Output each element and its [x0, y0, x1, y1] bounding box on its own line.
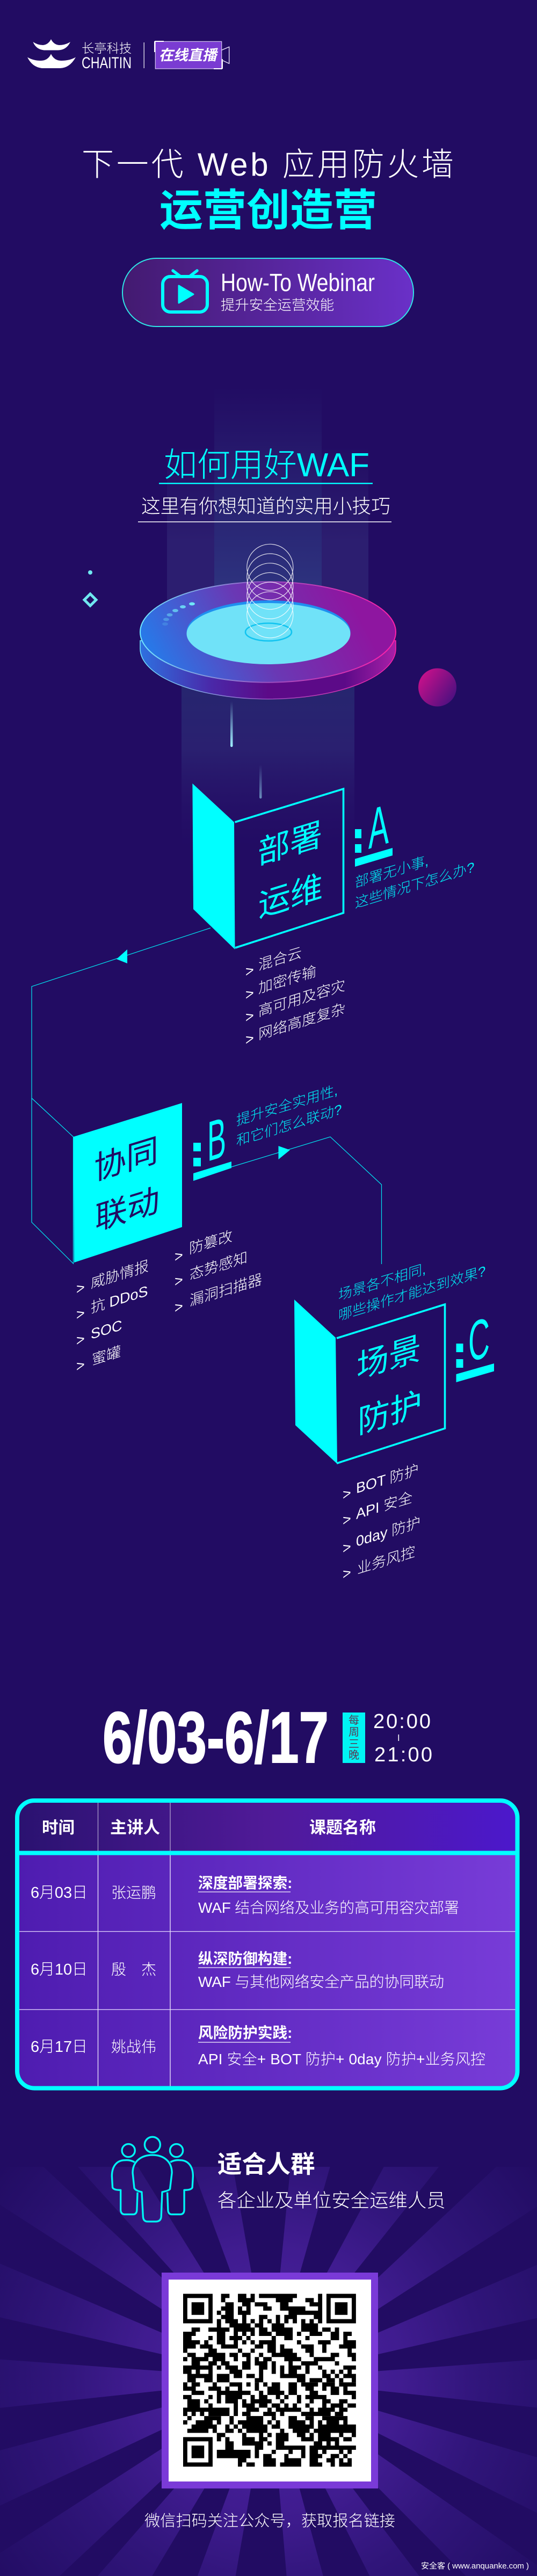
list B right: 防篡改: [189, 1228, 233, 1257]
row: June 10: 6月10日: [31, 1961, 88, 1978]
caption B: 提升安全实用性,: [236, 1082, 338, 1129]
list A: >: [245, 961, 254, 980]
subtitle: 运营创造营: [159, 187, 377, 235]
label: B: [193, 1105, 231, 1181]
row: June 10: 殷 杰: [111, 1961, 156, 1978]
time range: [373, 1710, 432, 1766]
list C: 业务风控: [357, 1543, 415, 1577]
list C: [343, 1461, 420, 1583]
list C: API 安全: [356, 1489, 412, 1522]
label: B: B: [207, 1105, 226, 1173]
list A: 高可用及容灾: [258, 977, 345, 1020]
arrow: B to C: [231, 1137, 381, 1264]
sunburst background: [0, 2167, 537, 2576]
label: C: C: [468, 1305, 490, 1374]
logo: Chaitin: CHAITIN: [82, 54, 132, 72]
list B left: SOC: [91, 1317, 122, 1343]
streaks of light: [230, 701, 262, 799]
date range: 6/03-6/17: [103, 1697, 329, 1778]
row: June 17: API 安全+ BOT 防护+ 0day 防护+业务风控: [198, 2051, 485, 2067]
caption A: 部署无小事,: [355, 853, 429, 891]
badge: live online: 在线直播: [158, 47, 220, 63]
list A: >: [245, 1029, 254, 1048]
logo: Chaitin: 长亭科技: [82, 41, 132, 55]
beams of light: [167, 387, 368, 848]
row: June 3: 深度部署探索:: [198, 1875, 292, 1891]
badge: every wednesday night: 晚: [349, 1749, 359, 1761]
list A: >: [245, 1007, 254, 1026]
badge: every wednesday night: 周: [349, 1726, 359, 1738]
arrow: A to B: [32, 928, 211, 1264]
badge: live online: [144, 41, 229, 69]
list C: >: [343, 1484, 351, 1503]
list C: BOT 防护: [356, 1461, 418, 1497]
badge: every wednesday night: 每: [349, 1714, 359, 1726]
audience heading: 适合人群: [217, 2151, 315, 2178]
badge: every wednesday night: 三: [349, 1738, 359, 1750]
list A: 加密传输: [258, 963, 316, 997]
caption C: 场景各不相同,: [338, 1261, 426, 1303]
badge: every wednesday night: [343, 1713, 365, 1763]
list B left: 蜜罐: [92, 1343, 121, 1368]
list B left: 抗 DDoS: [91, 1282, 148, 1316]
icon: tv play: [163, 271, 207, 312]
list C: 0day 防护: [356, 1514, 420, 1550]
list B right: 漏洞扫描器: [190, 1271, 262, 1309]
caption B: 和它们怎么联动?: [236, 1101, 342, 1149]
table header: [42, 1818, 376, 1837]
icon: people: [112, 2137, 193, 2222]
watermark: 安全客 ( www.anquanke.com ): [421, 2561, 529, 2571]
list A: >: [245, 984, 254, 1003]
platform disc: [140, 582, 396, 699]
table header: 时间: [42, 1819, 75, 1837]
label: A: A: [368, 792, 389, 861]
row: June 3: 6月03日: [31, 1884, 88, 1902]
row: June 10: WAF 与其他网络安全产品的协同联动: [198, 1973, 444, 1990]
list A: 网络高度复杂: [258, 1000, 345, 1043]
list B right: >: [175, 1271, 183, 1290]
table header: 主讲人: [110, 1818, 160, 1837]
list B left: 威胁情报: [91, 1258, 149, 1291]
QR code: [162, 2273, 378, 2488]
list B left: >: [76, 1279, 85, 1297]
panel: C scenario box: 场景: [357, 1330, 421, 1386]
schedule table: [17, 1801, 518, 2089]
pill: How-To Webinar: 提升安全运营效能: [221, 297, 334, 313]
caption C: 哪些操作才能达到效果?: [338, 1263, 485, 1324]
panel: A deployment box: 部署: [258, 816, 322, 872]
panel: C scenario box: [294, 1300, 445, 1464]
sphere: [418, 668, 456, 707]
decoration: dot and diamond: [84, 570, 96, 606]
panel: A deployment box: [192, 783, 344, 949]
list B right: >: [175, 1297, 183, 1316]
row: June 3: [31, 1875, 459, 1916]
QR caption: 微信扫码关注公众号，获取报名链接: [144, 2512, 395, 2530]
caption A: 这些情况下怎么办?: [355, 859, 474, 911]
pill: How-To Webinar: How-To Webinar: [221, 269, 375, 296]
row: June 17: [31, 2024, 485, 2067]
rings above the disc: [247, 544, 293, 638]
time range: 20:00: [373, 1710, 431, 1733]
list B left: >: [76, 1304, 85, 1323]
list A: [245, 944, 345, 1048]
table header: 课题名称: [309, 1818, 376, 1837]
row: June 17: 姚战伟: [111, 2038, 156, 2055]
heading: how to use WAF: 如何用好WAF: [164, 447, 369, 484]
panel: B collaboration box: [73, 1103, 182, 1262]
label: C: [456, 1305, 494, 1382]
list C: >: [343, 1538, 351, 1557]
list B right: 态势感知: [190, 1249, 248, 1283]
pill: How-To Webinar: [122, 258, 413, 326]
list B left: >: [76, 1356, 85, 1375]
list C: >: [343, 1564, 351, 1583]
label: A: [355, 792, 393, 867]
row: June 10: 纵深防御构建:: [198, 1950, 292, 1967]
panel: B collaboration box: 协同: [94, 1132, 158, 1188]
logo: Chaitin: [27, 39, 132, 72]
list A: 混合云: [258, 944, 302, 974]
row: June 3: 张运鹏: [111, 1884, 156, 1901]
title line: 下一代 Web 应用防火墙: [82, 147, 454, 183]
list B left: >: [76, 1330, 85, 1349]
panel: B collaboration box: 联动: [95, 1182, 159, 1238]
panel: A deployment box: 运维: [258, 869, 323, 925]
list B right: [175, 1228, 262, 1316]
row: June 10: [31, 1950, 444, 1990]
panel: C scenario box: 防护: [358, 1385, 422, 1441]
list B left: [76, 1258, 149, 1375]
list B right: >: [175, 1246, 183, 1265]
row: June 3: WAF 结合网络及业务的高可用容灾部署: [198, 1899, 459, 1916]
time range: 21:00: [374, 1744, 432, 1766]
audience description: 各企业及单位安全运维人员: [217, 2190, 446, 2211]
subheading: 这里有你想知道的实用小技巧: [141, 496, 390, 517]
list C: >: [343, 1510, 351, 1529]
row: June 17: 6月17日: [31, 2038, 88, 2056]
row: June 17: 风险防护实践:: [198, 2024, 292, 2041]
